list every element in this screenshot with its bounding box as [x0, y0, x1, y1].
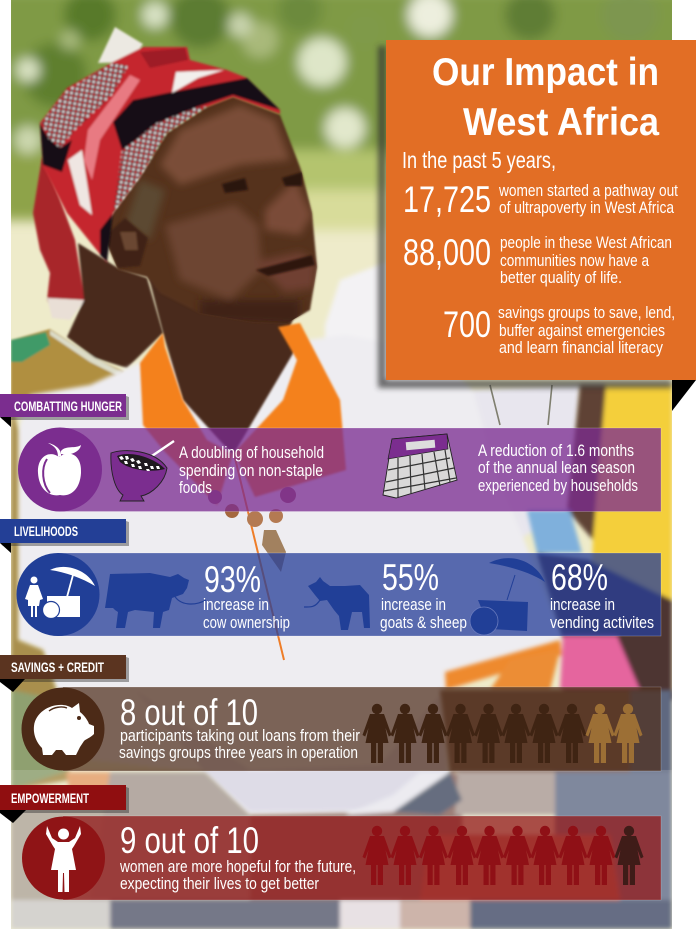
stat: 55% goats and sheep: increase in [381, 595, 446, 614]
stat: 88,000 people: better quality of life. [500, 268, 622, 287]
haze over lower photo [11, 770, 672, 929]
label: empowerment [0, 785, 129, 823]
lower body and lap [11, 400, 672, 929]
stat: 93% cow ownership: 93% [204, 559, 261, 600]
label: combatting hunger [0, 394, 129, 427]
necklace and lace [208, 450, 296, 660]
stat: 93% cow ownership [203, 559, 290, 632]
text: reduction of lean season: experienced by households [478, 477, 638, 495]
stat: 68% vending activities: 68% [551, 557, 608, 598]
text: 9 out of 10: expecting their lives to get better [120, 874, 319, 893]
stat: 68% vending activities: vending activites [550, 613, 654, 632]
background person on left [11, 157, 163, 400]
stat: 17,725 women: 17,725 [403, 179, 491, 220]
title: West Africa [463, 101, 659, 144]
panel: savings and credit [0, 655, 661, 771]
icon: goat [304, 577, 370, 630]
label: combatting hunger: COMBATTING HUNGER [14, 399, 122, 414]
white shirt [18, 335, 580, 815]
stat: 700 savings groups: 700 [443, 304, 491, 345]
stat: 88,000 people: communities now have a [500, 251, 649, 270]
icon: piggy bank [22, 688, 104, 770]
label: livelihoods [0, 519, 129, 553]
icon: woman with raised arms [22, 816, 105, 900]
face [103, 97, 317, 325]
band: savings [63, 687, 661, 771]
stat: 88,000 people [403, 232, 672, 287]
stat: 93% cow ownership: cow ownership [203, 613, 290, 632]
title: Our Impact in [432, 51, 659, 94]
fold: black corner below orange panel [672, 380, 696, 411]
stat: 68% vending activities [550, 557, 654, 632]
stat: 68% vending activities: increase in [550, 595, 615, 614]
icon: vendor with umbrella cart [16, 553, 100, 636]
text: 9 out of 10: women are more hopeful for the future, [119, 857, 356, 876]
text: 9 out of 10 [119, 820, 356, 893]
title [432, 51, 659, 144]
text: doubling of household spending [179, 444, 324, 497]
panel: livelihoods [0, 519, 661, 636]
stat: 55% goats and sheep: 55% [382, 557, 439, 598]
stat: 17,725 women [403, 179, 678, 220]
text: reduction of lean season: of the annual lean season [478, 459, 635, 477]
woman's neck [147, 270, 300, 455]
orange collar [140, 323, 346, 505]
icon: apple [18, 428, 102, 512]
label: livelihoods: LIVELIHOODS [14, 524, 78, 539]
band: hunger [60, 428, 661, 512]
text: 9 out of 10: 9 out of 10 [120, 820, 259, 861]
band: livelihoods [58, 553, 661, 636]
right-side clothing colours [445, 385, 672, 700]
text: doubling of household spending: A doubling of household [179, 444, 324, 462]
stat: 700 savings groups: and learn financial literacy [499, 338, 663, 357]
band: empowerment [63, 816, 661, 900]
lanyard on background shirt [490, 385, 552, 425]
text: 8 out of 10: savings groups three years in operation [119, 743, 358, 762]
headwrap [40, 27, 280, 263]
label: savings + credit [0, 655, 129, 692]
text: doubling of household spending: spending on non-staple [179, 462, 323, 480]
text: reduction of lean season [478, 442, 638, 495]
text: 8 out of 10 [119, 692, 360, 762]
icon: cow [105, 573, 206, 628]
panel: combatting hunger [0, 394, 661, 512]
background right person in white [323, 263, 386, 342]
intro line: In the past 5 years, [402, 147, 556, 173]
stat: 55% goats and sheep [380, 557, 467, 632]
icon: calendar [383, 434, 457, 498]
orange panel: Our Impact in West Africa [386, 40, 696, 380]
panel: empowerment [0, 785, 661, 900]
icon: vending cart [470, 558, 545, 635]
stat: 55% goats and sheep: goats & sheep [380, 613, 467, 632]
stat: 700 savings groups [443, 303, 675, 357]
stat: 93% cow ownership: increase in [203, 595, 269, 614]
text: reduction of lean season: A reduction of 1.6 months [478, 442, 634, 460]
label: savings + credit: SAVINGS + CREDIT [11, 660, 105, 675]
text: 8 out of 10: 8 out of 10 [120, 692, 258, 733]
pictogram: 8 of 10 women [362, 704, 642, 763]
label: empowerment: EMPOWERMENT [11, 791, 90, 806]
text: doubling of household spending: foods [179, 479, 212, 497]
text: 8 out of 10: participants taking out loans from their [120, 726, 360, 745]
orange header panel shadow [378, 46, 672, 388]
stat: 88,000 people: 88,000 [403, 232, 491, 273]
pictogram: 9 of 10 women [362, 826, 644, 885]
icon: bowl of cereal [111, 441, 174, 501]
